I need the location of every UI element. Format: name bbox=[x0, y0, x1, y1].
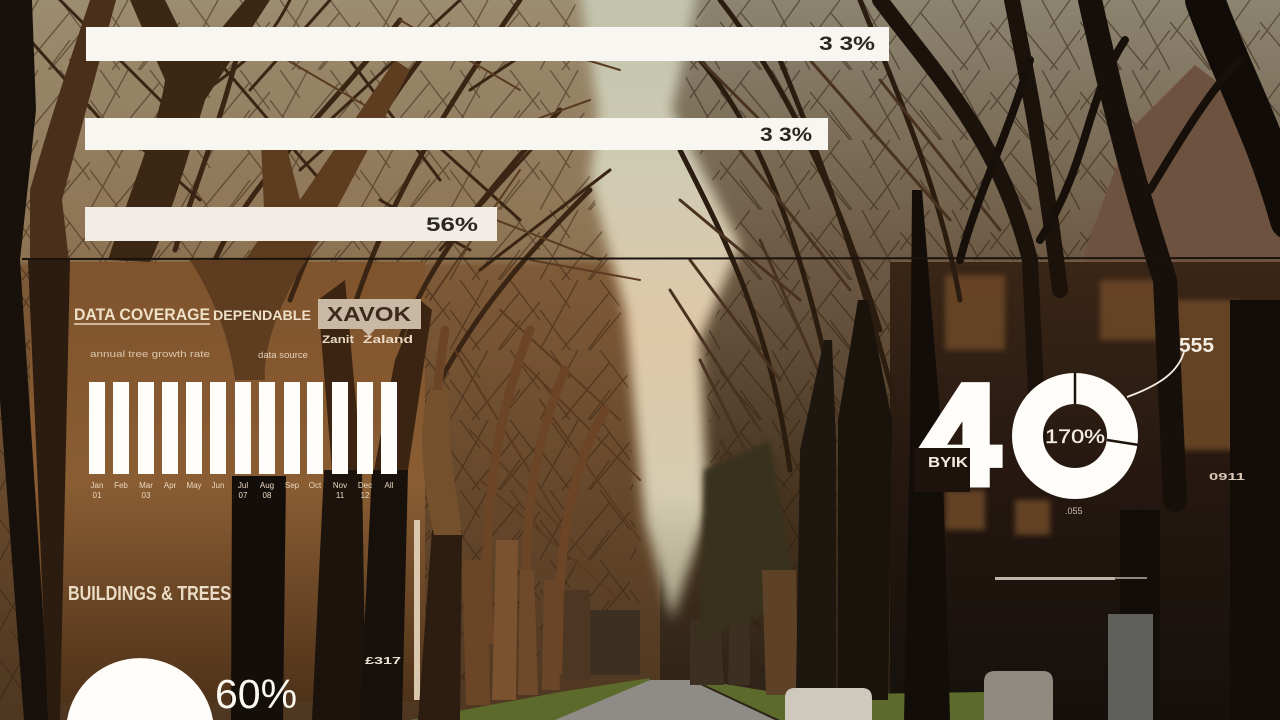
column chart axis labels: Feb bbox=[114, 481, 128, 490]
minor right labels bbox=[1065, 472, 1246, 516]
tree branches and trunks: right avenue bbox=[670, 0, 1280, 570]
minor right labels: .055 bbox=[1065, 506, 1083, 516]
big digit 4: 4 bbox=[921, 356, 999, 513]
column chart axis labels: 08 bbox=[263, 491, 272, 500]
column chart axis labels: Dec bbox=[358, 481, 372, 490]
bar 1: 3 3% bbox=[819, 34, 875, 55]
small caption near trunk: £317 bbox=[365, 656, 402, 667]
donut chart bbox=[1028, 388, 1122, 484]
column chart axis labels: Nov bbox=[333, 481, 347, 490]
bar tall grey bbox=[1108, 614, 1153, 720]
column chart axis labels: Aug bbox=[260, 481, 274, 490]
column chart axis labels: 07 bbox=[239, 491, 248, 500]
heading text block left: annual tree growth rate bbox=[90, 349, 210, 359]
upper-right roof bbox=[1085, 65, 1280, 262]
bottom-right progress line bbox=[995, 577, 1147, 580]
column chart: thirteen white bars bbox=[89, 382, 397, 474]
bottom-right bars bbox=[785, 614, 1153, 720]
column chart axis labels: 03 bbox=[142, 491, 151, 500]
bar 3 bbox=[85, 207, 497, 241]
dark backing under crossbar bbox=[914, 448, 970, 492]
minor right labels: 0911 bbox=[1209, 472, 1246, 483]
heading text block left bbox=[74, 305, 311, 360]
column chart axis labels: Jan bbox=[91, 481, 103, 490]
column chart axis labels: 11 bbox=[336, 491, 345, 500]
column chart axis labels: Mar bbox=[139, 481, 153, 490]
branching trunk pair bbox=[108, 0, 270, 262]
column chart axis labels: 01 bbox=[93, 491, 102, 500]
column chart axis labels bbox=[91, 481, 394, 500]
heading text block left: DATA COVERAGE bbox=[74, 305, 210, 324]
bar mid grey bbox=[984, 671, 1053, 720]
bottom-left white circle stat bbox=[67, 658, 297, 720]
right canopy tone bbox=[660, 0, 1280, 720]
column chart axis labels: May bbox=[186, 481, 202, 490]
right twig texture bbox=[680, 0, 1280, 700]
tree trunks: left avenue bbox=[0, 0, 640, 720]
bar chart: horizontal progress bars bbox=[85, 27, 889, 241]
heading text block left: DEPENDABLE bbox=[213, 307, 311, 323]
column chart axis labels: Apr bbox=[164, 481, 177, 490]
left twig texture bbox=[0, 0, 640, 700]
big number and donut bbox=[914, 335, 1214, 513]
central sky opening bbox=[578, 0, 740, 620]
donut centre value: 170% bbox=[1045, 427, 1105, 448]
column chart axis labels: 12 bbox=[361, 491, 370, 500]
callout leader line bbox=[1127, 352, 1184, 397]
trunks: right avenue lower bbox=[690, 190, 1280, 720]
column chart axis labels: Jun bbox=[212, 481, 224, 490]
left canopy tone bbox=[0, 0, 660, 720]
column chart axis labels: Sep bbox=[285, 481, 300, 490]
left fork bbox=[30, 0, 116, 270]
callout value: 555 bbox=[1179, 335, 1214, 357]
callout label bbox=[318, 299, 421, 346]
column chart axis labels: Jul bbox=[238, 481, 248, 490]
bar 3: 56% bbox=[426, 215, 478, 236]
column chart axis labels: Oct bbox=[309, 481, 322, 490]
column chart axis labels: All bbox=[385, 481, 394, 490]
dark avenue trunks bbox=[231, 476, 286, 720]
label under crossbar: BYIK bbox=[928, 454, 968, 471]
bottom-left white circle stat: 60% bbox=[215, 671, 297, 717]
heading text block left: data source bbox=[258, 350, 308, 360]
bar short pale bbox=[785, 688, 872, 720]
dark building mass right bbox=[890, 262, 1280, 720]
callout label: Zanit bbox=[322, 334, 354, 346]
horizontal divider line bbox=[22, 258, 1280, 259]
callout label: XAVOK bbox=[327, 304, 412, 326]
trunk splits above bbox=[318, 280, 432, 470]
right brown patches bbox=[945, 275, 1240, 535]
callout label: Zaland bbox=[363, 334, 413, 346]
tree branches: left avenue bbox=[30, 0, 640, 670]
bar 2: 3 3% bbox=[760, 125, 812, 146]
lower left caption: BUILDINGS & TREES bbox=[68, 583, 231, 605]
brown building wall left bbox=[30, 262, 425, 702]
bar 1 bbox=[86, 27, 889, 61]
far-left trunk bbox=[0, 0, 50, 720]
bar 2 bbox=[85, 118, 828, 150]
road bbox=[555, 680, 775, 720]
grass bbox=[410, 678, 985, 720]
